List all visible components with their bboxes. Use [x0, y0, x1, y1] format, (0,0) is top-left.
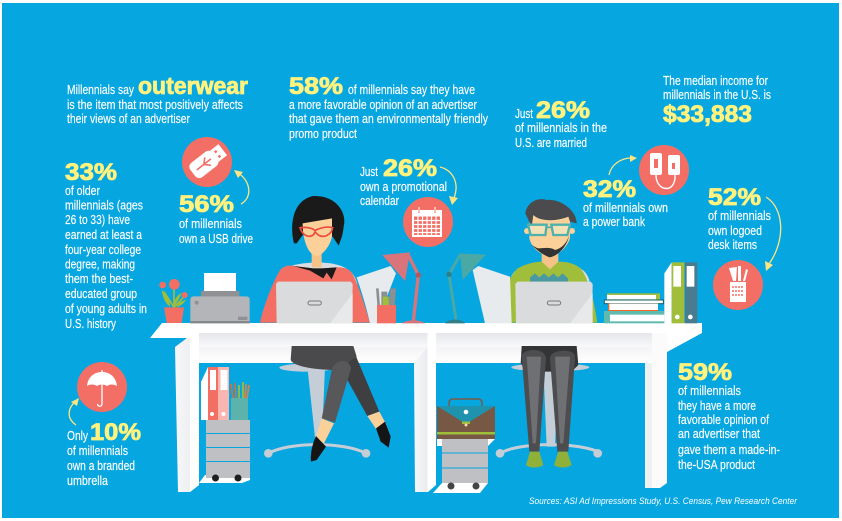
text: median income: millennials in the U.S. is [663, 88, 771, 102]
arrow: 26% to calendar [440, 167, 458, 205]
text: 56% USB drive: 56% [179, 191, 234, 218]
plant [159, 279, 188, 323]
text: 32% power bank: of millennials own [583, 201, 668, 215]
text: 10% umbrella [67, 419, 141, 488]
text: 58% environmentally friendly: that gave them an environmentally friendly [289, 112, 489, 126]
arrow: 56% to USB [234, 170, 249, 204]
cabinet: right [433, 438, 495, 493]
text: outerwear: their views of an advertiser [67, 112, 190, 126]
lamp: teal [445, 253, 512, 323]
icon: umbrella [77, 362, 127, 412]
text: 33% older millennials: earned at least a [65, 228, 142, 242]
text: 58% environmentally friendly: a more favorable opinion of an advertiser [289, 98, 477, 112]
text: 33% older millennials: educated group [65, 287, 137, 301]
text: 33% older millennials: 33% [65, 159, 117, 186]
man laptop [515, 282, 593, 323]
text: 52% logoed desk items: of millennials [708, 209, 771, 223]
text: 33% older millennials [65, 159, 147, 331]
text: 59% made in USA: an advertiser that [678, 427, 760, 441]
arrow: 32% to power bank [609, 155, 637, 175]
text: 59% made in USA: they have a more [678, 399, 756, 413]
text: 26% married: 26% [536, 97, 590, 124]
text: 26% calendar: calendar [360, 194, 399, 208]
text: 26% married [515, 97, 607, 150]
text: 56% USB drive: of millennials [179, 217, 242, 231]
icon: power bank [639, 145, 689, 195]
text: 59% made in USA [678, 359, 780, 472]
text: 33% older millennials: U.S. history [65, 317, 117, 331]
cabinet: left [199, 420, 250, 483]
icon: desk items [713, 260, 763, 310]
man figure [495, 199, 597, 323]
text: 56% USB drive: own a USB drive [179, 232, 253, 246]
text: 10% umbrella: own a branded [67, 459, 135, 473]
text: 32% power bank [583, 176, 668, 229]
text: 33% older millennials: 26 to 33) have [65, 213, 130, 227]
text: 58% environmentally friendly: promo product [289, 127, 357, 141]
lamp: coral [357, 252, 425, 323]
pen cup [376, 288, 396, 323]
text: 59% made in USA: favorable opinion of [678, 413, 769, 427]
printer [190, 273, 250, 323]
text: 32% power bank: a power bank [583, 215, 646, 229]
text: 33% older millennials: them the best- [65, 272, 133, 286]
text: 33% older millennials: of young adults in [65, 302, 147, 316]
text: 52% logoed desk items: desk items [708, 238, 757, 252]
woman legs [291, 346, 391, 462]
text: 58% environmentally friendly: 58% [289, 73, 343, 100]
text: 26% calendar: Just [360, 165, 378, 179]
text: 58% environmentally friendly [289, 73, 489, 141]
pencil cup [231, 382, 249, 420]
text: 59% made in USA: gave them a made-in- [678, 443, 780, 457]
text: 10% umbrella: Only [67, 429, 89, 443]
text: median income: The median income for [663, 74, 768, 88]
text: outerwear [67, 73, 248, 126]
text: median income [663, 74, 771, 128]
text: 10% umbrella: umbrella [67, 474, 108, 488]
text: 26% calendar: own a promotional [360, 180, 447, 194]
man legs [521, 346, 578, 467]
icon: calendar [403, 197, 453, 247]
text: 26% married: of millennials in the [515, 121, 607, 135]
text: 52% logoed desk items [708, 184, 771, 252]
text: 10% umbrella: 10% [90, 419, 141, 446]
desk [150, 323, 702, 492]
woman chair [264, 262, 370, 458]
text: 33% older millennials: of older [65, 184, 100, 198]
text: 59% made in USA: 59% [678, 359, 732, 386]
text: 56% USB drive [179, 191, 253, 246]
text: 52% logoed desk items: own logoed [708, 224, 762, 238]
text: outerwear: is the item that most positively affects [67, 98, 243, 112]
binders: green and teal [664, 262, 697, 323]
books [604, 293, 664, 323]
text: median income: $33,883 [663, 101, 752, 128]
arrow: 10% to umbrella [69, 398, 79, 425]
text: 10% umbrella: of millennials [67, 444, 128, 458]
text: 59% made in USA: of millennials [678, 384, 741, 398]
text: 33% older millennials: degree, making [65, 258, 135, 272]
woman laptop [276, 282, 353, 323]
text: 33% older millennials: millennials (ages [65, 198, 143, 212]
text: outerwear: Millennials say [67, 83, 135, 97]
icon: USB drive [182, 137, 232, 187]
text: 26% calendar: 26% [383, 155, 437, 182]
binders: red and pink [201, 367, 229, 420]
man chair [496, 262, 602, 458]
text: 59% made in USA: the-USA product [678, 458, 755, 472]
text: outerwear: outerwear [138, 73, 248, 100]
text: sources: Sources: ASI Ad Impressions Study, U.S. Census, Pew Research Center [529, 496, 798, 507]
briefcase [437, 399, 495, 439]
text: 52% logoed desk items: 52% [708, 184, 761, 211]
text: 58% environmentally friendly: of millennials say they have [348, 83, 475, 97]
arrow: 52% to desk items [765, 197, 781, 271]
text: 33% older millennials: four-year college [65, 243, 141, 257]
text: 26% married: Just [515, 107, 533, 121]
text: 26% married: U.S. are married [515, 136, 587, 150]
woman figure [260, 196, 370, 323]
text: 32% power bank: 32% [583, 176, 636, 203]
text: 26% calendar [360, 155, 447, 208]
